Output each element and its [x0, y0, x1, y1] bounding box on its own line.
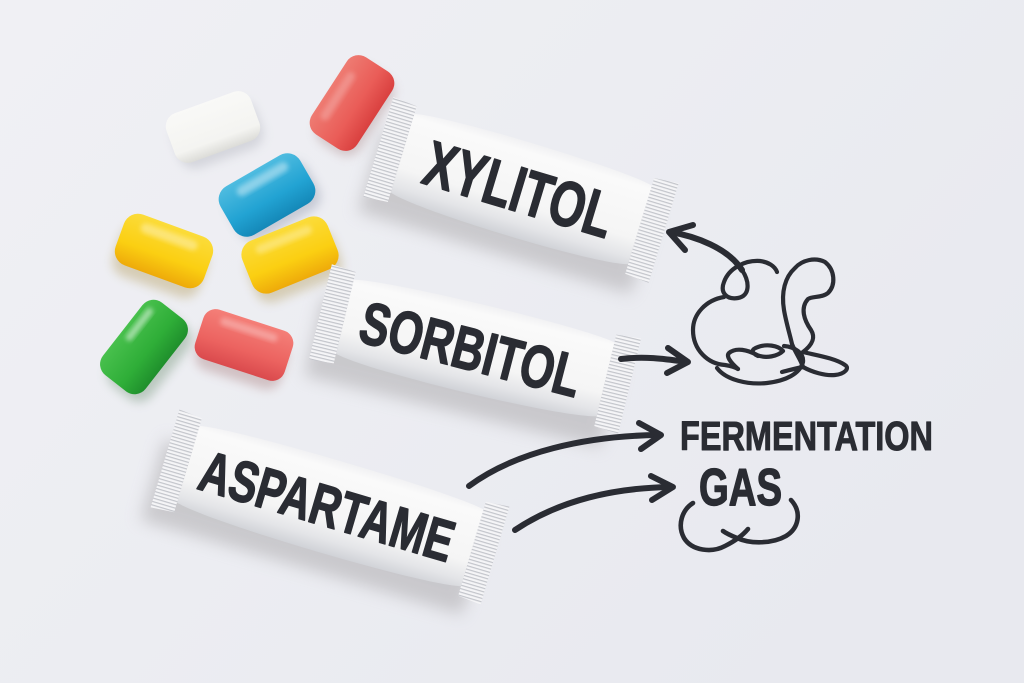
packet: aspartame: ASPARTAME [192, 438, 462, 575]
gum: yellow right [237, 212, 347, 307]
arrow: sorbitol [621, 348, 688, 373]
packet: aspartame [141, 408, 509, 619]
label: gas: GAS [699, 459, 782, 517]
gum: white [162, 87, 268, 174]
icon: gut outline [693, 260, 847, 383]
gum: coral [188, 306, 297, 394]
packet: sorbitol [304, 264, 641, 450]
gum: yellow left [107, 210, 217, 303]
gum: red [302, 50, 404, 162]
icon: gas swirl [681, 500, 798, 550]
packet: xylitol [358, 97, 679, 298]
arrow: aspartame to gas [515, 476, 673, 530]
arrow: aspartame to fermentation [469, 423, 661, 486]
label: fermentation: FERMENTATION [680, 413, 933, 459]
arrow: to xylitol [669, 225, 742, 270]
packet: xylitol: XYLITOL [416, 127, 622, 252]
gum: green [92, 294, 201, 409]
gum pieces [92, 50, 404, 409]
gum: blue [213, 147, 327, 249]
packet: sorbitol: SORBITOL [353, 289, 589, 410]
